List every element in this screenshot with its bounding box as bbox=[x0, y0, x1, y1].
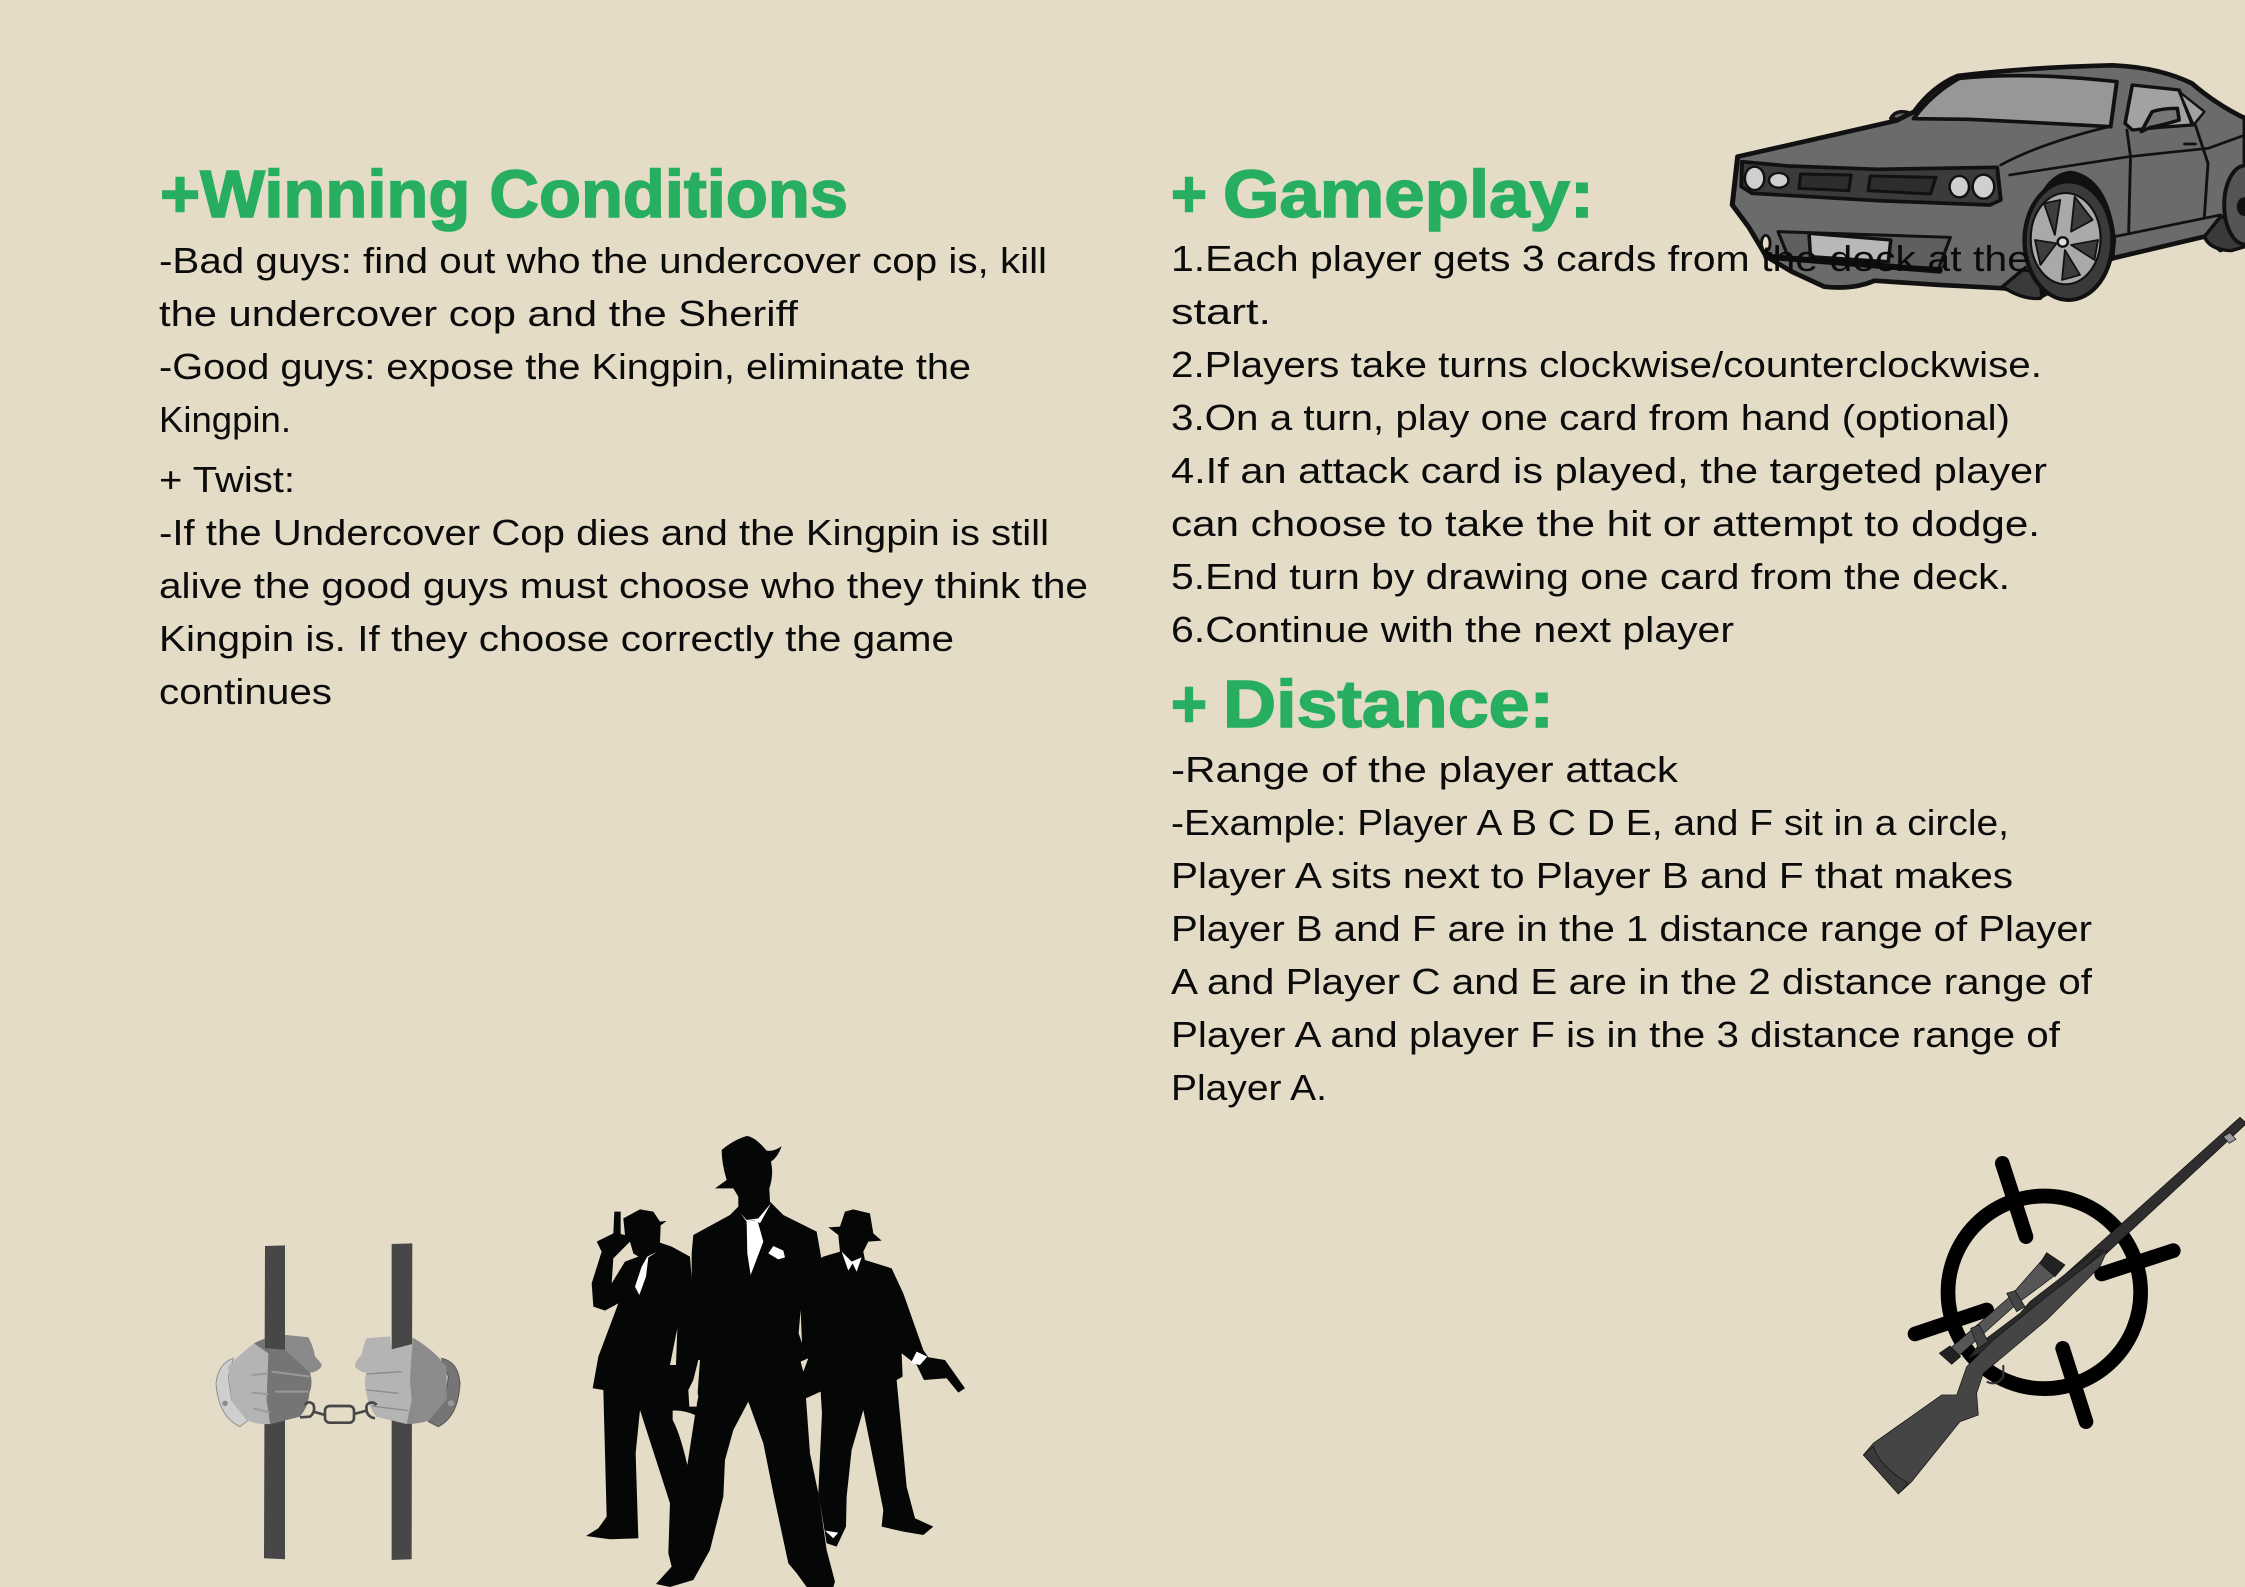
text block: twist: continues bbox=[159, 671, 332, 712]
heading: Distance: + bbox=[1171, 667, 1207, 742]
illustration: handcuffed hands on prison bars bbox=[216, 1243, 460, 1560]
text block: twist: + Twist: bbox=[159, 459, 295, 500]
text block: gameplay steps: 2.Players take turns clockwise/counterclockwise. bbox=[1171, 344, 2042, 385]
figure: central gangster bbox=[656, 1136, 835, 1587]
text block: winning conditions rules: Kingpin. bbox=[159, 399, 291, 440]
text block: distance explanation: A and Player C and E are in the 2 distance range of bbox=[1171, 961, 2093, 1002]
text block: gameplay steps: 4.If an attack card is played, the targeted player bbox=[1171, 450, 2047, 491]
text block: winning conditions rules: -Bad guys: find out who the undercover cop is, kill bbox=[159, 240, 1047, 281]
text block: twist bbox=[159, 459, 1088, 712]
text block: gameplay steps: can choose to take the hit or attempt to dodge. bbox=[1171, 503, 2040, 544]
heading: Gameplay: Gameplay: bbox=[1223, 157, 1594, 232]
heading: Winning Conditions: +Winning Conditions bbox=[160, 157, 848, 232]
text block: gameplay steps: 5.End turn by drawing one card from the deck. bbox=[1171, 556, 2010, 597]
text block: distance explanation: Player A sits next to Player B and F that makes bbox=[1171, 855, 2013, 896]
text block: gameplay steps: 1.Each player gets 3 cards from the deck at the bbox=[1171, 238, 2030, 279]
text block: gameplay steps: start. bbox=[1171, 291, 1271, 332]
text block: gameplay steps: 3.On a turn, play one card from hand (optional) bbox=[1171, 397, 2010, 438]
text block: distance explanation: Player B and F are in the 1 distance range of Player bbox=[1171, 908, 2092, 949]
heading: Gameplay: + bbox=[1171, 157, 1207, 232]
text block: gameplay steps bbox=[1171, 238, 2047, 650]
illustration: three gangster silhouettes bbox=[586, 1136, 965, 1587]
text block: distance explanation: Player A and player F is in the 3 distance range of bbox=[1171, 1014, 2061, 1055]
icon: sniper rifle bbox=[1863, 1117, 2245, 1494]
illustration: grey muscle car bbox=[1732, 65, 2245, 300]
text block: distance explanation: -Example: Player A B C D E, and F sit in a circle, bbox=[1171, 802, 2009, 843]
text block: distance explanation bbox=[1171, 749, 2093, 1108]
heading: Distance: Distance: bbox=[1223, 667, 1554, 742]
text block: winning conditions rules: -Good guys: expose the Kingpin, eliminate the bbox=[159, 346, 971, 387]
text block: twist: -If the Undercover Cop dies and the Kingpin is still bbox=[159, 512, 1049, 553]
figure: left gangster with raised pistol bbox=[586, 1209, 698, 1553]
text block: gameplay steps: 6.Continue with the next player bbox=[1171, 609, 1734, 650]
figure: right gangster with lowered pistol bbox=[803, 1209, 965, 1547]
illustration: rifle over crosshair target bbox=[1863, 1117, 2245, 1494]
text block: winning conditions rules bbox=[159, 240, 1047, 440]
text block: distance explanation: -Range of the player attack bbox=[1171, 749, 1679, 790]
text block: winning conditions rules: the undercover cop and the Sheriff bbox=[159, 293, 799, 334]
text block: distance explanation: Player A. bbox=[1171, 1067, 1327, 1108]
text block: twist: Kingpin is. If they choose correctly the game bbox=[159, 618, 954, 659]
icon: crosshair bbox=[1915, 1163, 2173, 1422]
text block: twist: alive the good guys must choose who they think the bbox=[159, 565, 1088, 606]
